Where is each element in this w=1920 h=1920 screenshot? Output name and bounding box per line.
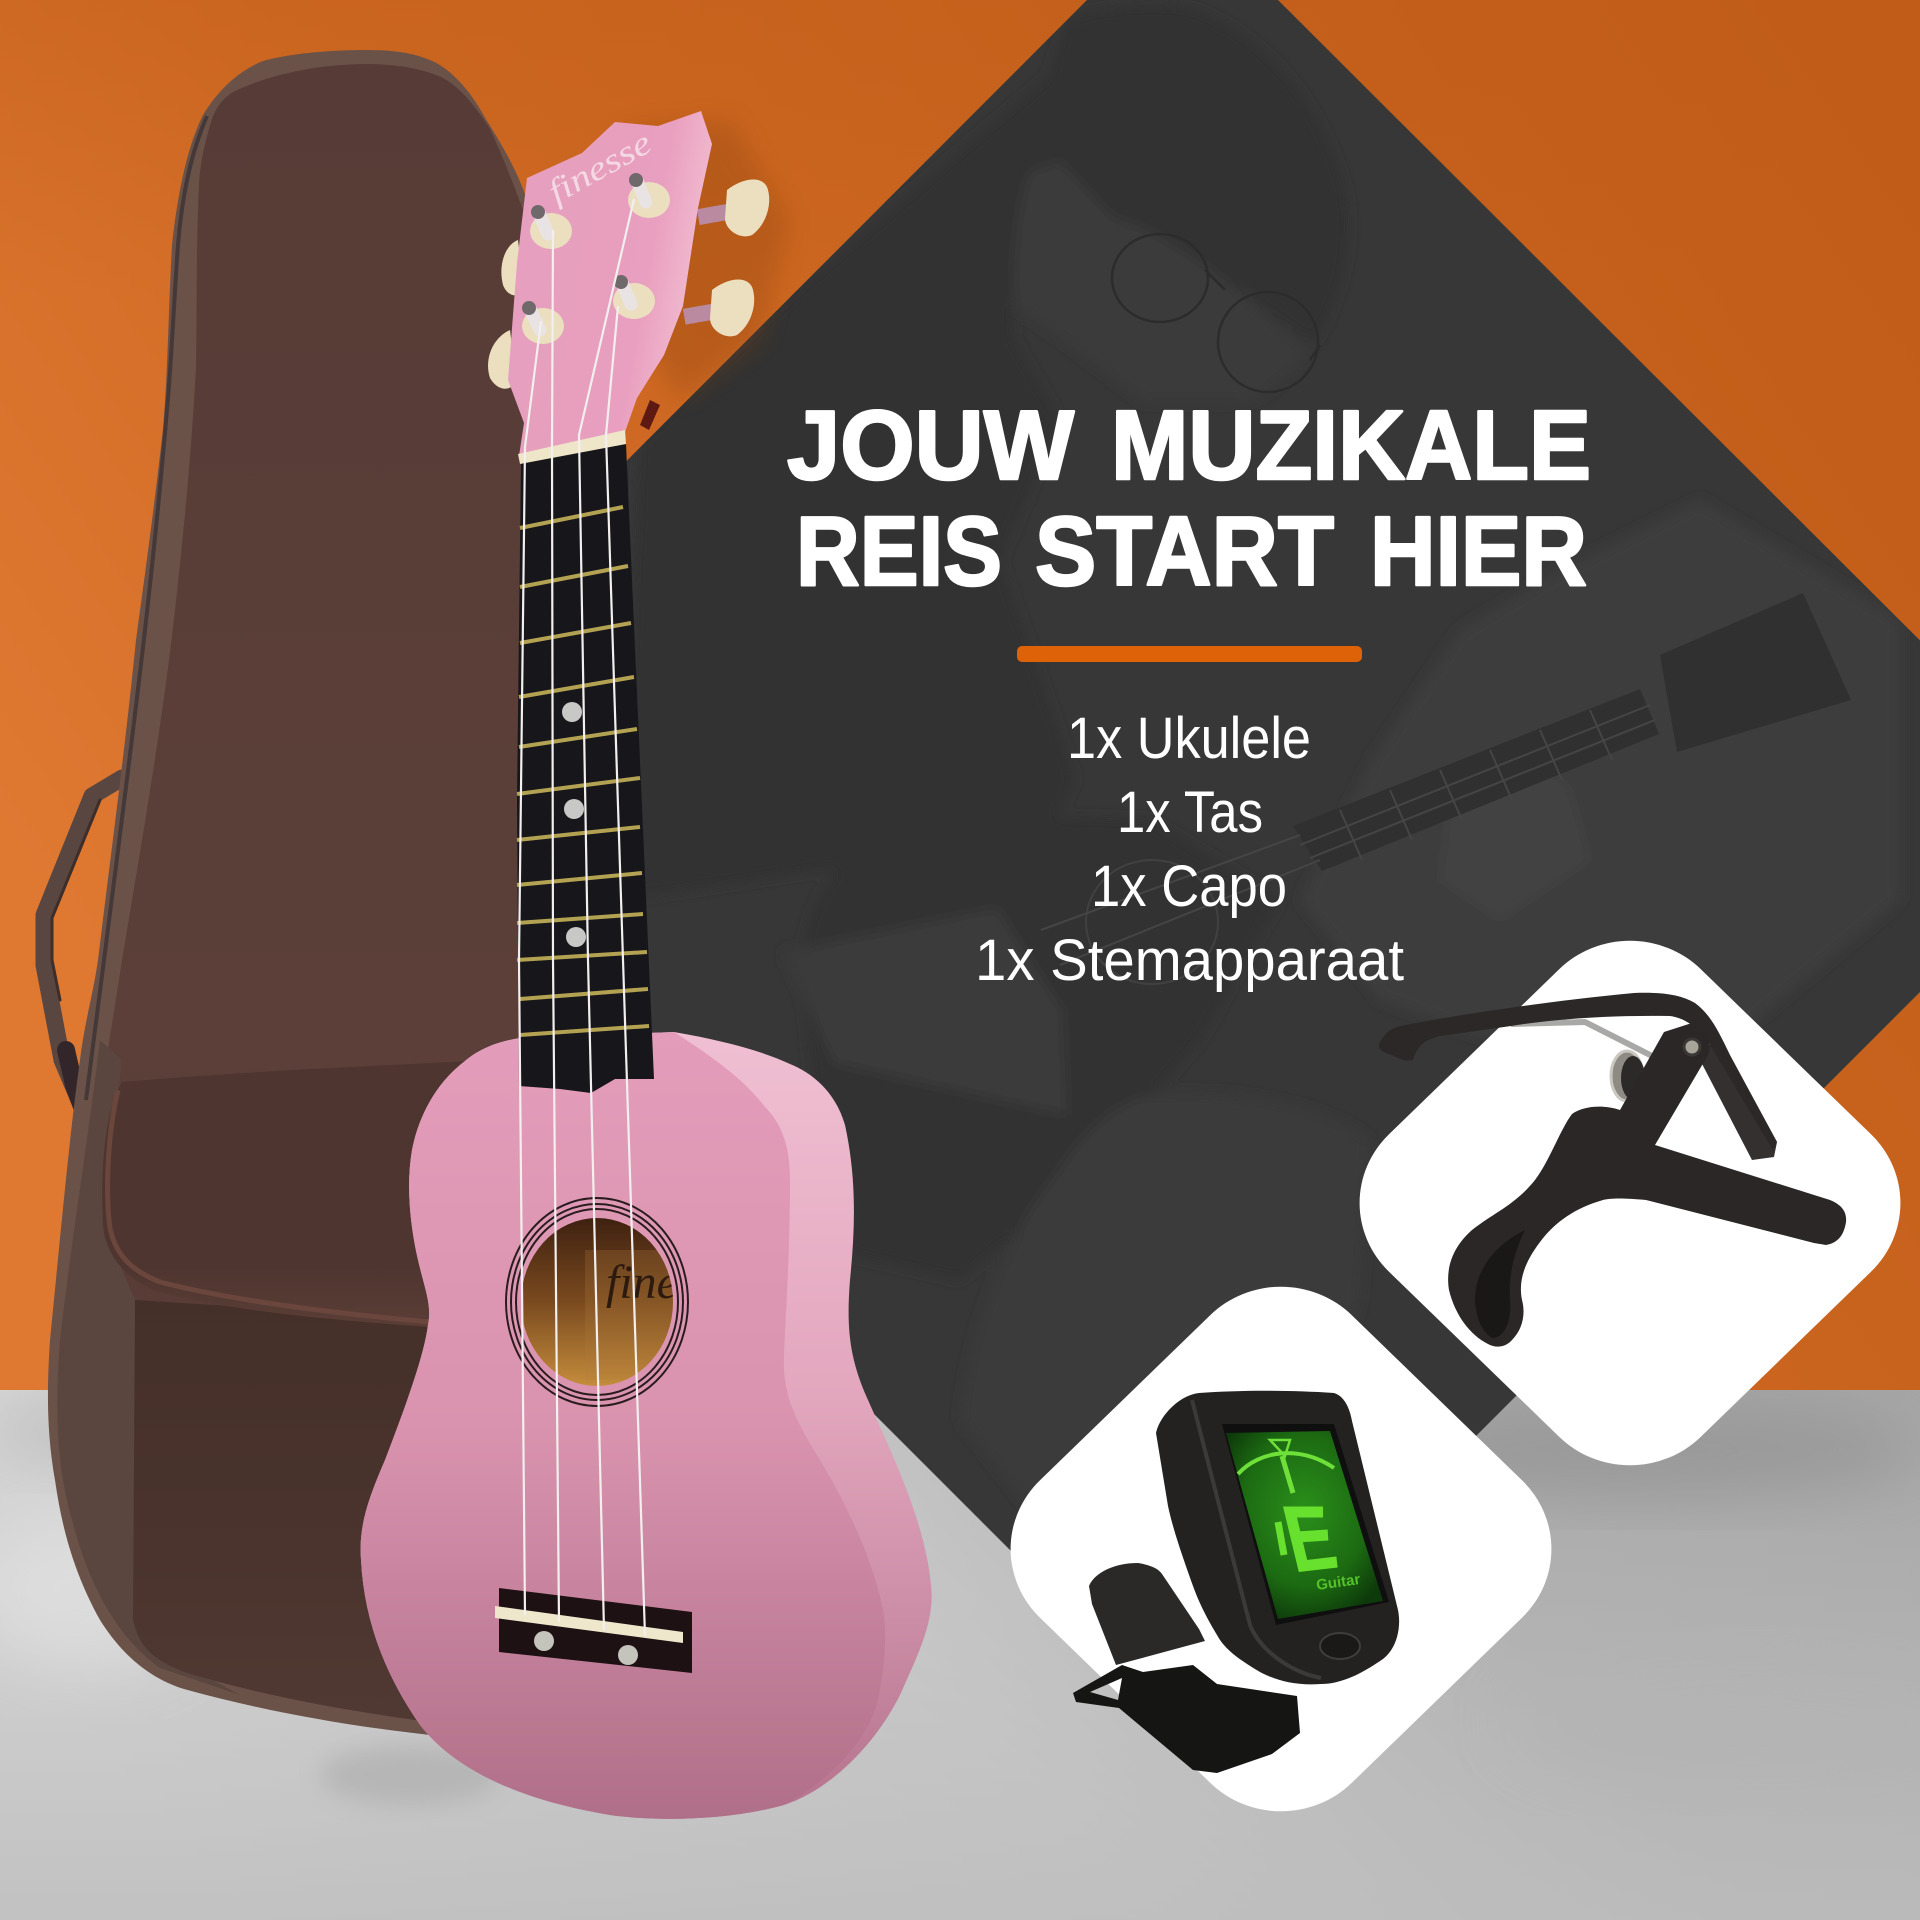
contents list: 1x Tas [1117,780,1263,845]
ghost: ukulele body [802,815,1280,1280]
contents list: 1x Ukulele [1067,706,1311,771]
tuner: clip upper jaw [1089,1563,1205,1665]
tuner: clip lower arm [1073,1665,1300,1773]
floor shadow under ukulele [320,1745,500,1805]
capo: rear jaw [1700,1040,1777,1160]
ghost: face [1014,161,1309,402]
ghost: glasses [1112,234,1320,392]
ghost: hand [802,916,1060,1107]
title: HIER [1370,496,1587,606]
bag: outer shell [48,50,560,1735]
ukulele: left tuning pegs [488,240,524,389]
contents list [975,706,1404,993]
capo: top arm [1379,993,1777,1150]
tuner: body bevel [1192,1400,1321,1678]
ukulele: tuning posts [522,173,670,344]
capo tile [1318,901,1920,1505]
ukulele: bridge [495,1588,692,1673]
ghost: ukulele neck and head [1041,593,1851,984]
tuner: tuning arc and needle [1238,1440,1334,1493]
ukulele [361,111,932,1819]
title: JOUW [787,390,1074,500]
bag: pocket flap [102,1058,530,1335]
ukulele: right tuning pegs [683,180,769,336]
capo: textured grip pad [1475,1230,1525,1338]
ghost: knee [960,1093,1370,1600]
bag: zipper line [86,116,207,1100]
ukulele: logo: finesse [542,124,658,211]
tuner: green screen [1226,1431,1383,1619]
contents list: 1x Stemapparaat [975,928,1404,993]
title [787,390,1591,606]
ukulele: strings [519,199,645,1636]
ghost: hair left side [635,255,832,452]
capo [1379,993,1846,1347]
title: START [1035,496,1334,606]
ukulele: inner label: fine [606,1256,678,1309]
contents list: 1x Capo [1091,854,1287,919]
ukulele: body front [361,1032,885,1819]
bag: main panel [100,64,560,1700]
orange divider bar [1017,646,1362,662]
ukulele: frets [517,507,649,1035]
ukulele: nut [518,430,626,464]
gig bag [44,50,560,1736]
tuner: power button [1320,1633,1360,1659]
ukulele: inner label [585,1250,673,1378]
ukulele: sound hole [521,1218,673,1386]
capo: spring coil [1611,1051,1645,1101]
bag: lower side band [57,1040,240,1695]
dark diamond panel with ghosted player photo [626,0,1920,1551]
ghost: hair dome [1040,6,1348,344]
headstock shadow on wall [620,120,790,400]
clip-on tuner [1073,1391,1399,1773]
ukulele: headstock [508,111,712,456]
title: MUZIKALE [1111,390,1591,500]
tuner tile [969,1247,1593,1851]
capo: lever and grip [1448,1022,1846,1347]
tuner: mode label: Guitar [1315,1571,1361,1594]
title: REIS [796,496,1002,606]
ukulele: body side [361,1032,932,1819]
tuner: screen bezel [1222,1424,1389,1625]
tuner: note letter [1278,1512,1337,1566]
ukulele: fretboard [517,444,654,1093]
background: orange wall [0,0,1920,1392]
ghost: light sleeve [1300,500,1900,1100]
bag: handle strap [44,778,122,1112]
tuner: body [1156,1391,1399,1684]
ghost: fretting hand [1440,765,1590,920]
ghost: blurred figure shapes [635,12,1903,921]
background: concrete floor [0,1390,1920,1920]
ukulele: red neck heel [640,400,660,430]
capo: steel spring strip [1511,1022,1652,1056]
ukulele: fret markers [562,702,586,947]
capo: pivot screw [1684,1039,1700,1055]
bag: lower pocket [133,1300,540,1736]
ukulele: rosette [506,1198,688,1406]
bag: flap seam [108,1090,430,1322]
